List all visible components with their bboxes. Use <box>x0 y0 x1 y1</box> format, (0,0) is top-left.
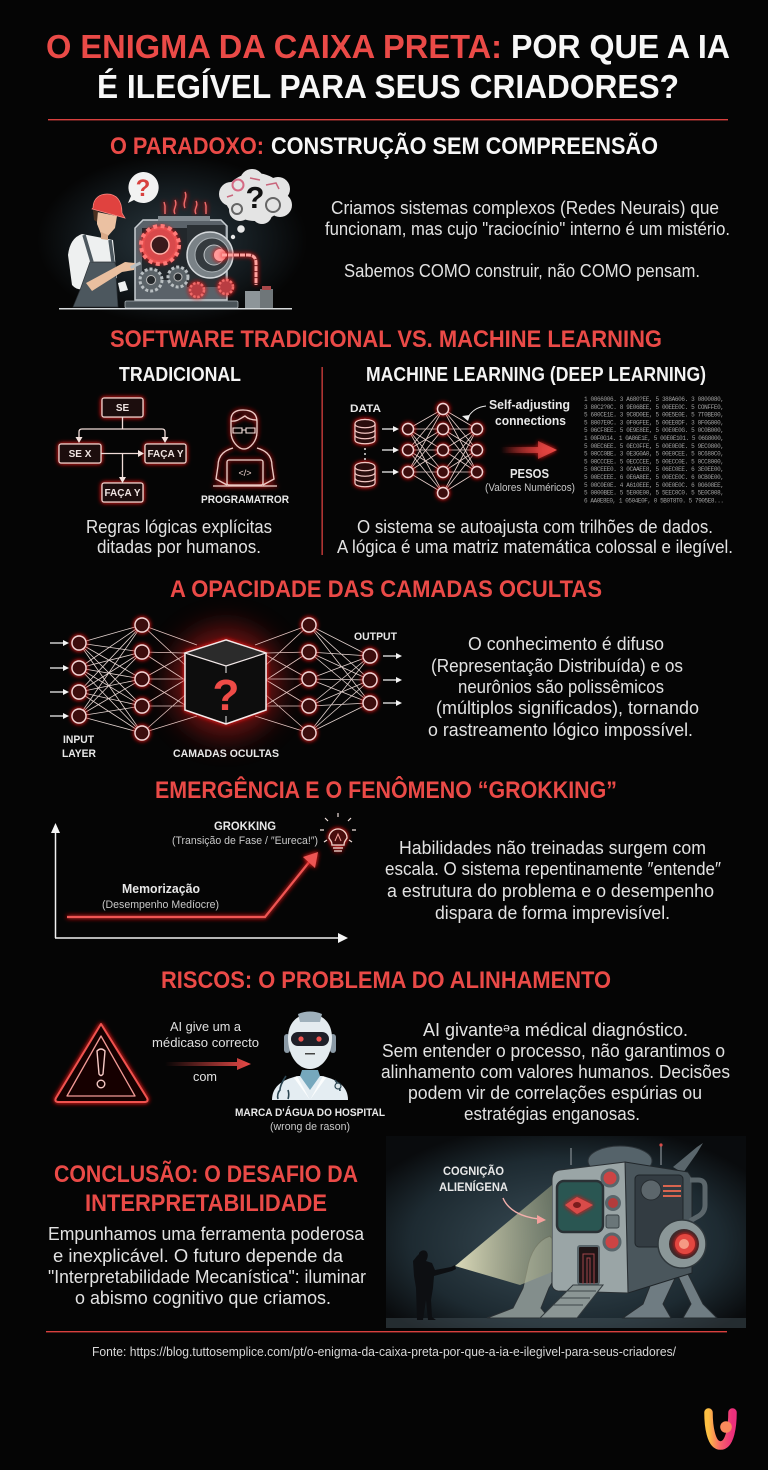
icon: robot doctor <box>235 1012 385 1133</box>
text: conclusion description: o abismo cognitivo que criamos. <box>75 1288 331 1308</box>
engineer <box>68 234 117 289</box>
icon: programmer <box>201 410 289 506</box>
text: hidden layers description: (Representação Distribuída) e os <box>431 656 683 676</box>
icon: data cylinders: DATA <box>350 403 381 415</box>
weights matrix: 1 00F0G14. 1 0A86E1E, 5 00E0E101. 5 06G8000, <box>584 435 724 442</box>
text: grokking description: a estrutura do problema e o desempenho <box>387 881 714 901</box>
annotation: self-adjusting connections: connections <box>495 413 566 428</box>
text: risks description <box>381 1020 730 1124</box>
thought cloud <box>219 169 292 239</box>
heading: conclusão: INTERPRETABILIDADE <box>85 1190 327 1217</box>
heading: o paradoxo: CONSTRUÇÃO SEM COMPREENSÃO <box>271 132 658 160</box>
chart: grokking curve: Memorização <box>122 882 200 896</box>
diagram: neural network with black box <box>50 618 402 760</box>
weights matrix: 5 8007E0C. 3 0F0GFEE, 5 00EE0DF. 3 0F0G000, <box>584 419 724 426</box>
speech bubble with question mark <box>128 172 159 203</box>
annotation: self-adjusting connections <box>462 397 570 428</box>
flowchart: FAÇA Y <box>104 488 141 499</box>
label: pesos <box>485 466 575 494</box>
annotation: self-adjusting connections: Self-adjusting <box>489 397 570 412</box>
weights matrix: 5 06CF8EE. 5 0E9E8EE, 5 00E0E0G. 5 0C0B000, <box>584 427 724 434</box>
weights matrix: 6 AA0E8E0, 1 0504E0F, 0 5B0T8T0. 5 7905E8... <box>584 497 724 504</box>
subheading: tradicional: TRADICIONAL <box>119 364 241 386</box>
heading: grokking: EMERGÊNCIA E O FENÔMENO “GROKKING” <box>155 776 617 804</box>
large wheel <box>187 232 233 278</box>
icon: light bulb <box>320 813 356 851</box>
annotation: cognição alienígena: ALIENÍGENA <box>439 1179 508 1194</box>
title: É ILEGÍVEL PARA SEUS CRIADORES? <box>97 68 679 105</box>
weights matrix: 5 00CCCEE. 5 0ECCCEE, 5 00ECC0E. 5 0CC8000, <box>584 458 724 465</box>
illustration: engineer and machine <box>37 155 307 325</box>
chart: grokking curve <box>51 813 356 943</box>
text: hidden layers description <box>428 634 699 740</box>
text: risks description: AI givanteᵊa médical diagnóstico. <box>423 1020 688 1040</box>
text: conclusion description: "Interpretabilidade Mecanística": iluminar <box>48 1267 366 1287</box>
weights matrix: 5 00C0E0E. 4 A610EEE, 5 00E0E0C. 6 0G608EE, <box>584 482 724 489</box>
weights matrix: 5 00CC0BE. 3 0E3G0A0, 5 00E0CEE. 5 0C680C0, <box>584 451 724 458</box>
weights matrix: 5 00ECEEE. 6 0E6A8EE, 5 00ECE0C. 6 0CB0E00, <box>584 474 724 481</box>
heading: o paradoxo <box>110 132 658 160</box>
panel: grokking <box>51 776 722 943</box>
weights matrix: 5 00EC6EE. 5 0EC0FFE, 5 00E0E0E. 5 9EC0800, <box>584 443 724 450</box>
text: risks description: estratégias enganosas. <box>464 1104 640 1124</box>
text: machine learning description <box>337 517 733 557</box>
panel: riscos <box>55 967 730 1133</box>
flowchart: SE <box>116 403 129 414</box>
flowchart: FAÇA Y <box>147 449 184 460</box>
robot legs <box>487 1236 563 1318</box>
heading: camadas ocultas: A OPACIDADE DAS CAMADAS OCULTAS <box>170 576 602 603</box>
heading: comparison: SOFTWARE TRADICIONAL VS. MACHINE LEARNING <box>110 326 662 353</box>
cube: ? <box>213 671 239 720</box>
diagram: neural network with black box: CAMADAS OCULTAS <box>173 748 279 760</box>
illustration: robot and flashlight <box>386 1136 746 1328</box>
thought cloud: ? <box>246 180 264 215</box>
panel: tradicional <box>59 364 289 557</box>
text: paradox description: Criamos sistemas complexos (Redes Neurais) que <box>331 198 719 218</box>
text: risks description: podem vir de correlações espúrias ou <box>408 1083 702 1103</box>
panel: camadas ocultas <box>50 576 699 760</box>
person with flashlight <box>413 1250 456 1320</box>
robot door and ramp <box>578 1246 599 1284</box>
glowing pipe <box>222 255 256 285</box>
neural network <box>402 404 482 498</box>
bench line <box>59 308 292 310</box>
text: hidden layers description: o rastreamento lógico impossível. <box>428 720 693 740</box>
text: machine learning description: A lógica é uma matriz matemática colossal e ilegível. <box>337 537 733 557</box>
text: hidden layers description: neurônios são polissêmicos <box>458 677 664 697</box>
robot knobs <box>602 1170 618 1186</box>
text: hidden layers description: O conhecimento é difuso <box>468 634 664 654</box>
text: hidden layers description: (múltiplos significados), tornando <box>436 698 699 718</box>
icon: robot doctor: MARCA D'ÁGUA DO HOSPITAL <box>235 1106 385 1119</box>
weights matrix: 3 80C2?0C. 8 9E06BEE, 5 00EEE0C. 5 CONFFE0, <box>584 404 724 411</box>
title <box>46 28 730 105</box>
heading: riscos: RISCOS: O PROBLEMA DO ALINHAMENTO <box>161 967 611 994</box>
arrow: to weights <box>501 441 557 459</box>
chart: grokking curve: GROKKING <box>214 819 276 833</box>
text: grokking description: dispara de forma imprevisível. <box>435 903 670 923</box>
logo <box>708 1412 732 1446</box>
text: grokking description: Habilidades não treinadas surgem com <box>399 838 706 858</box>
icon: programmer: PROGRAMATROR <box>201 494 289 506</box>
icon: programmer: </> <box>238 468 252 478</box>
icon: robot doctor: (wrong de rason) <box>270 1121 350 1133</box>
title: O ENIGMA DA CAIXA PRETA: <box>46 28 502 65</box>
weights matrix: 1 0066006. 3 A680?EE, 5 388A606. 3 0800080, <box>584 396 724 403</box>
heading: o paradoxo: O PARADOXO: <box>110 133 264 160</box>
text: traditional description: Regras lógicas explícitas <box>86 517 272 537</box>
diagram: neural network with black box: LAYER <box>62 748 96 760</box>
text: conclusion description: Empunhamos uma ferramenta poderosa <box>48 1224 365 1244</box>
callout: ai diagnosis: com <box>193 1070 217 1084</box>
weights matrix: 5 0000BEE. 5 5E00E00, 5 5EEC0C0. 5 5E0C008, <box>584 490 724 497</box>
panel: machine learning <box>337 364 733 557</box>
speech bubble with question mark: ? <box>136 175 150 202</box>
text: conclusion description <box>48 1224 366 1308</box>
callout: ai diagnosis: AI give um a <box>170 1020 241 1034</box>
panel: software tradicional vs machine learning <box>59 326 733 557</box>
text: grokking description: escala. O sistema repentinamente ″entende″ <box>385 859 722 879</box>
callout: ai diagnosis <box>152 1020 259 1084</box>
heading: conclusão <box>54 1160 358 1217</box>
red gear <box>143 228 177 262</box>
text: traditional description: ditadas por humanos. <box>97 537 261 557</box>
weights matrix <box>584 396 724 504</box>
weights matrix: 5 600CE1E. 3 9C0D0EE, 5 00E5E0E. 5 7T0BE00, <box>584 412 724 419</box>
flowchart: SE X <box>69 449 92 460</box>
text: paradox description: Sabemos COMO construir, não COMO pensam. <box>344 261 700 281</box>
source: Fonte: https://blog.tuttosemplice.com/pt/o-enigma-da-caixa-preta-por-que-a-ia-e-ilegivel-para-seus-criadores/ <box>92 1344 676 1359</box>
label: pesos: PESOS <box>510 466 549 481</box>
panel: conclusão <box>48 1136 746 1328</box>
text: grokking description <box>385 838 722 923</box>
diagram: neural network with black box: INPUT <box>63 734 94 746</box>
text: traditional description <box>86 517 272 557</box>
text: conclusion description: e inexplicável. O futuro depende da <box>53 1246 344 1266</box>
text: risks description: alinhamento com valores humanos. Decisões <box>381 1062 730 1082</box>
text: risks description: Sem entender o processo, não garantimos o <box>382 1041 725 1061</box>
annotation: cognição alienígena <box>439 1163 546 1224</box>
weights matrix: 5 08CEEE0. 3 0CAAEE8, 5 06EC0EE. 6 3E0EE00, <box>584 466 724 473</box>
grey gears <box>140 269 162 291</box>
panel: o paradoxo <box>37 132 730 325</box>
chart: grokking curve: (Desempenho Medíocre) <box>102 899 219 911</box>
robot body <box>588 1146 652 1176</box>
callout: ai diagnosis: médicaso correcto <box>152 1036 259 1050</box>
light beam <box>455 1185 552 1285</box>
heading: conclusão: CONCLUSÃO: O DESAFIO DA <box>54 1160 358 1188</box>
flowchart <box>59 398 186 502</box>
label: pesos: (Valores Numéricos) <box>485 482 575 494</box>
annotation: cognição alienígena: COGNIÇÃO <box>443 1163 504 1178</box>
chart: grokking curve: (Transição de Fase / ″Eureca!″) <box>172 835 318 847</box>
icon: warning triangle <box>55 1024 148 1102</box>
robot side details <box>635 1175 683 1247</box>
text: machine learning description: O sistema se autoajusta com trilhões de dados. <box>357 517 713 537</box>
title: POR QUE A IA <box>511 28 730 65</box>
subheading: machine learning: MACHINE LEARNING (DEEP LEARNING) <box>366 364 706 386</box>
machine body <box>135 220 227 300</box>
text: paradox description <box>325 198 730 281</box>
text: paradox description: funcionam, mas cujo "raciocínio" interno é um mistério. <box>325 219 730 239</box>
diagram: neural network with black box: OUTPUT <box>354 631 397 643</box>
icon: data cylinders <box>350 403 399 487</box>
cube <box>185 640 266 724</box>
